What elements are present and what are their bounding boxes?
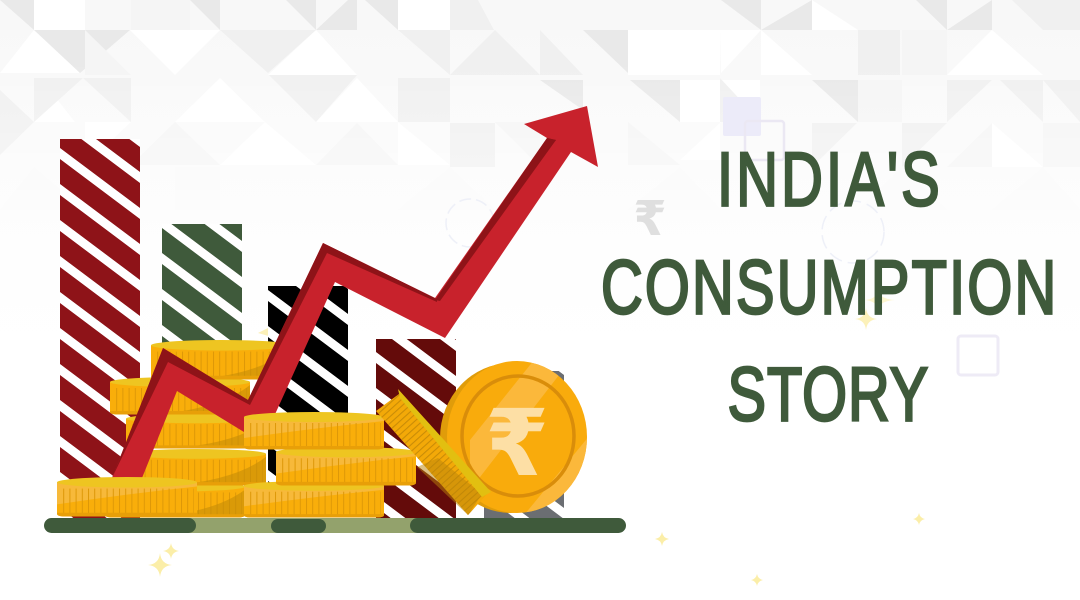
coin stack behind arrow (105, 340, 291, 518)
bar: green (162, 224, 242, 354)
decorative dashed circle near title (822, 201, 884, 263)
decorative lilac square (723, 97, 761, 136)
title (601, 138, 1056, 437)
title: STORY (728, 353, 928, 437)
ground pill centre (271, 519, 326, 533)
bar: black (268, 286, 348, 486)
coin stack in front of arrow (57, 412, 416, 518)
title: CONSUMPTION (601, 246, 1056, 330)
bar: grey (484, 371, 564, 518)
bar: dark maroon (376, 339, 456, 518)
title: INDIA'S (717, 138, 940, 222)
big rupee coin (440, 361, 587, 513)
tilted coin (376, 389, 491, 515)
ground pill left (44, 518, 196, 533)
faint rupee symbol: ₹ (633, 191, 667, 247)
bar: tall red (60, 139, 140, 518)
growth arrow (112, 106, 598, 478)
ground strip (150, 518, 450, 533)
decorative outlined square top (745, 121, 784, 160)
bar chart with coins and arrow (44, 106, 626, 533)
decorative dashed circle near arrow (446, 199, 494, 247)
ground pill right (410, 518, 626, 533)
sparkle stars (148, 291, 925, 586)
decorative outlined square right (958, 336, 998, 375)
big rupee coin: ₹ (485, 390, 549, 497)
